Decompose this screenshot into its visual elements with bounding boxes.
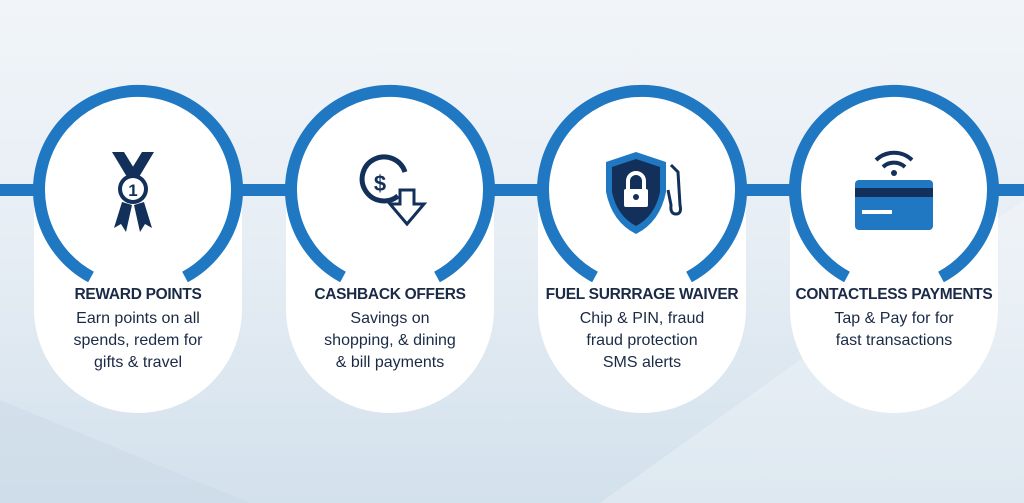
- text: reward points: gifts & travel: [94, 354, 182, 371]
- text: fuel: [546, 286, 738, 371]
- text: fuel: Chip & PIN, fraud: [580, 310, 704, 327]
- text: contactless: Tap & Pay for for: [834, 310, 954, 327]
- text: cashback: [314, 286, 466, 371]
- icon: medal: [112, 152, 154, 232]
- card 4: [790, 87, 998, 413]
- text: reward points: spends, redem for: [74, 332, 202, 349]
- card 2: [286, 87, 494, 413]
- text: contactless: [796, 286, 992, 349]
- text: cashback: Savings on: [350, 310, 430, 327]
- text: cashback: & bill payments: [336, 354, 444, 371]
- text: reward points: [74, 286, 202, 371]
- icon: cashback: [362, 157, 424, 224]
- text: fuel: FUEL SURRRAGE WAIVER: [546, 286, 738, 303]
- card 1: [34, 87, 242, 413]
- text: cashback: CASHBACK OFFERS: [314, 286, 466, 303]
- icon: contactless card: [855, 153, 933, 230]
- card 3: [538, 87, 746, 413]
- text: fuel: SMS alerts: [603, 354, 681, 371]
- icon: cashback: $: [374, 171, 386, 196]
- text: reward points: Earn points on all: [76, 310, 200, 327]
- icon: medal: 1: [128, 181, 138, 200]
- text: fuel: fraud protection: [586, 332, 698, 349]
- icon: shield lock + fuel: [606, 152, 680, 234]
- text: cashback: shopping, & dining: [324, 332, 456, 349]
- connector line: [0, 184, 1024, 196]
- text: contactless: fast transactions: [836, 332, 952, 349]
- text: reward points: REWARD POINTS: [74, 286, 202, 303]
- text: contactless: CONTACTLESS PAYMENTS: [796, 286, 992, 303]
